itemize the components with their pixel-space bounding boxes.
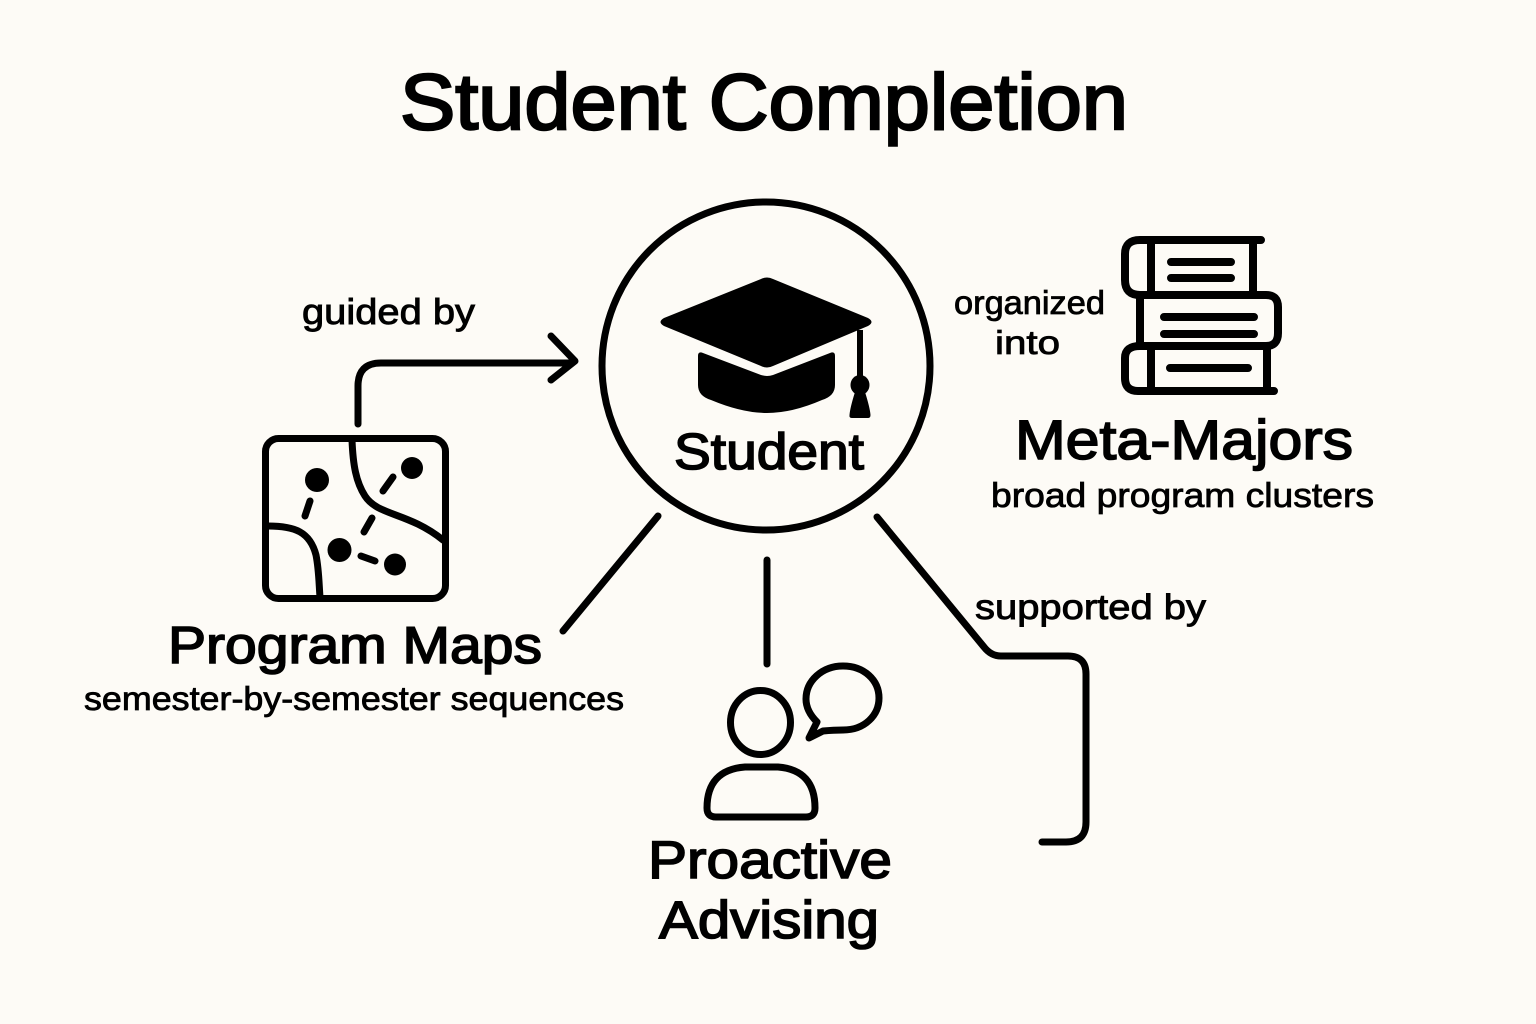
node circle [602,202,930,530]
heading: Proactive Advising: Advising [659,891,879,950]
icon: stacked books [1125,240,1278,391]
heading: Proactive Advising: Proactive [648,831,892,890]
connector label: organized into: organized [954,284,1105,321]
heading: Meta-Majors: Meta-Majors [1015,408,1353,471]
heading: Proactive Advising [648,831,892,950]
connector: student to proactive advising [764,560,770,664]
description: program maps: semester-by-semester sequences [84,680,624,717]
connector label: guided by: guided by [302,291,475,332]
node label: Student [674,423,864,480]
icon: advisor with speech bubble [707,666,879,817]
connector label: supported by: supported by [975,588,1207,627]
connector label: organized into: into [995,324,1060,361]
connector: supported by path [877,517,1086,842]
title: Student Completion [400,57,1128,146]
description: meta-majors: broad program clusters [991,477,1374,515]
central student node [602,202,930,530]
arrow: program maps to student [358,336,575,424]
connector: student to program maps [563,516,658,631]
icon: graduation cap [660,278,872,418]
heading: Program Maps: Program Maps [168,617,542,675]
connector label: organized into [954,284,1105,361]
icon: program map [266,438,446,598]
